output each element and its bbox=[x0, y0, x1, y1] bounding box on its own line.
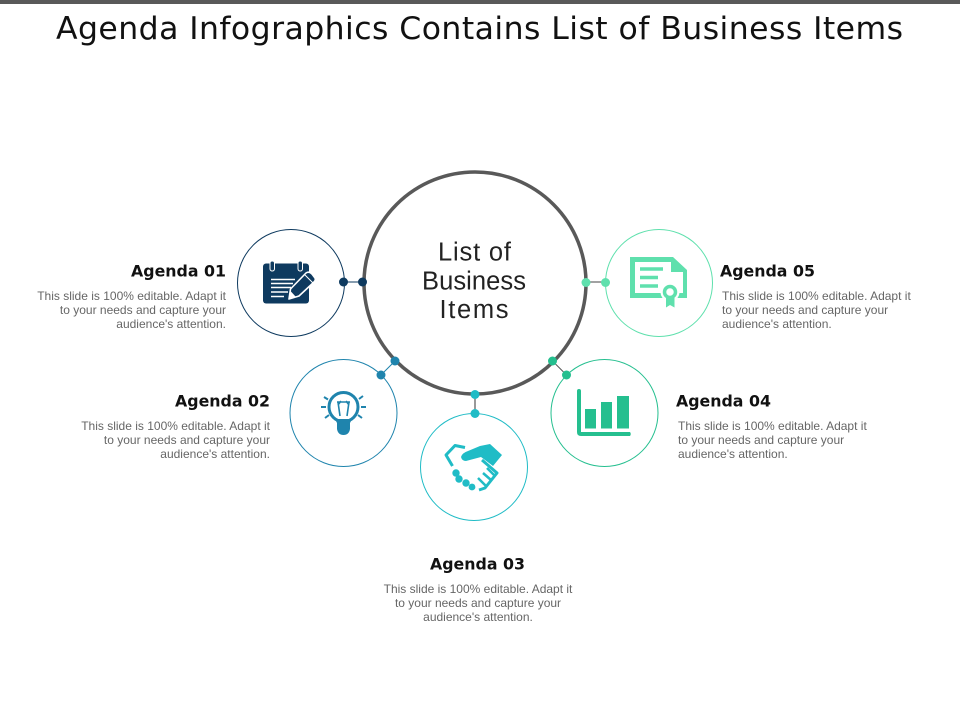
heading: Agenda 01 bbox=[131, 262, 226, 280]
description: This slide is 100% editable. Adapt it bbox=[678, 419, 867, 433]
description: audience's attention. bbox=[722, 317, 832, 331]
central label: Business bbox=[422, 268, 526, 296]
description: to your needs and capture your bbox=[722, 303, 888, 317]
description: to your needs and capture your bbox=[678, 433, 844, 447]
description: audience's attention. bbox=[423, 610, 533, 624]
item: agenda 01 bbox=[37, 230, 367, 336]
heading: Agenda 04 bbox=[676, 392, 771, 410]
description: audience's attention. bbox=[160, 447, 270, 461]
description: This slide is 100% editable. Adapt it bbox=[722, 289, 911, 303]
heading: Agenda 05 bbox=[720, 262, 815, 280]
description: to your needs and capture your bbox=[104, 433, 270, 447]
central label: Items bbox=[440, 296, 508, 324]
icon: light bulb bbox=[321, 392, 366, 435]
description: audience's attention. bbox=[678, 447, 788, 461]
item: agenda 02 bbox=[81, 356, 400, 466]
description: This slide is 100% editable. Adapt it bbox=[81, 419, 271, 433]
item: agenda 04 bbox=[548, 356, 867, 466]
title: Agenda Infographics Contains List of Business Items bbox=[56, 11, 903, 47]
icon: certificate bbox=[630, 257, 687, 308]
central circle bbox=[364, 172, 586, 394]
description: to your needs and capture your bbox=[60, 303, 226, 317]
central label: List of bbox=[438, 238, 512, 266]
heading: Agenda 02 bbox=[175, 392, 270, 410]
icon: handshake bbox=[446, 444, 502, 490]
item: agenda 05 bbox=[582, 230, 911, 336]
icon: bar chart bbox=[577, 389, 631, 436]
heading: Agenda 03 bbox=[430, 554, 525, 574]
description: audience's attention. bbox=[116, 317, 226, 331]
icon: calendar with pencil bbox=[263, 261, 315, 304]
description: This slide is 100% editable. Adapt it bbox=[37, 289, 227, 303]
item: agenda 03 bbox=[384, 390, 573, 624]
description: to your needs and capture your bbox=[395, 596, 561, 610]
description: This slide is 100% editable. Adapt it bbox=[384, 582, 573, 596]
